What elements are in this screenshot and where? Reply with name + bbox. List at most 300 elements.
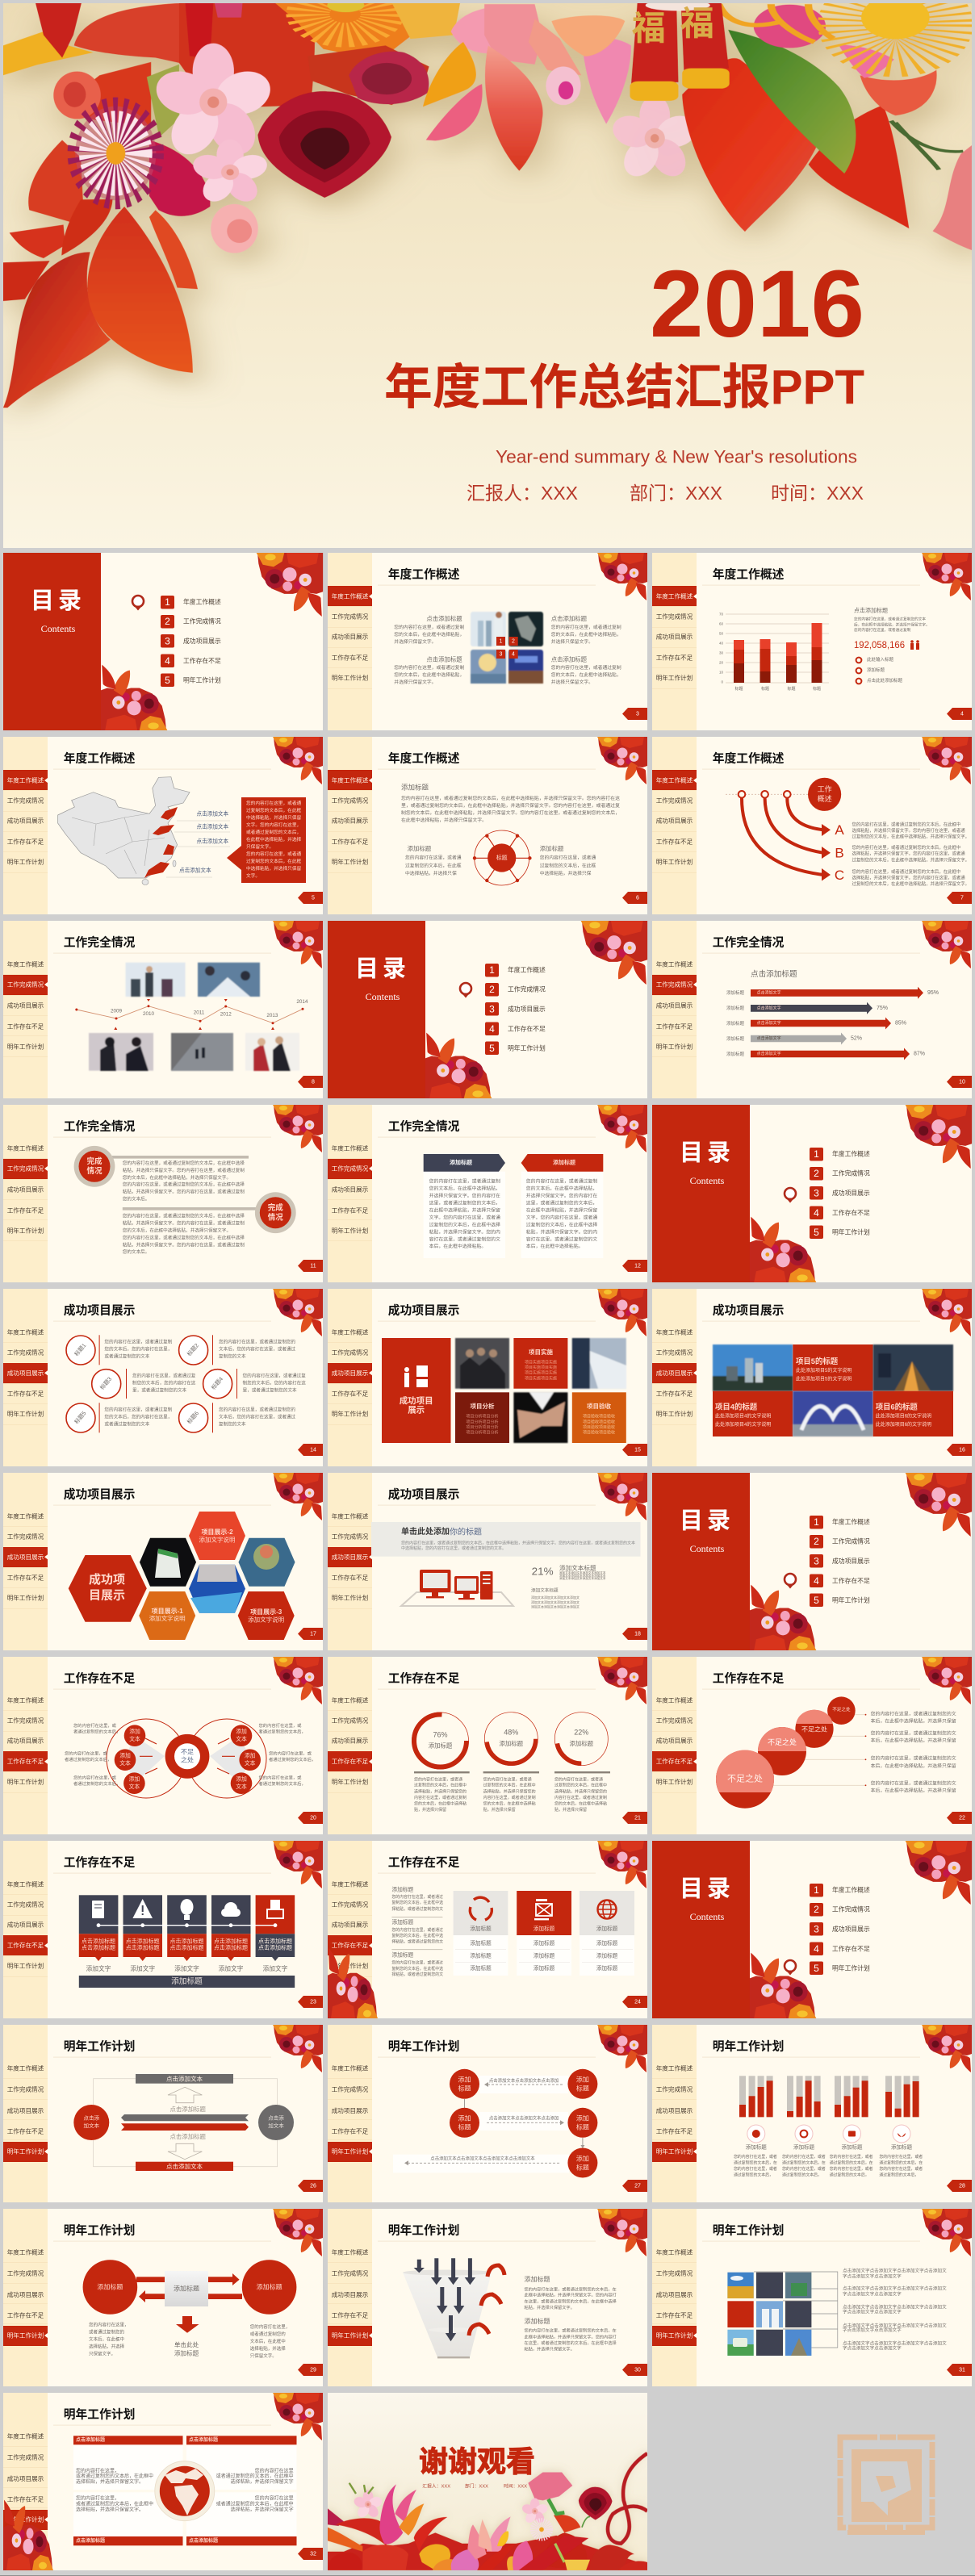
card recycle: 添加标题	[470, 1925, 492, 1932]
annotations: 点击添加文字点击添加文字点击添加文字点击添加文	[843, 2322, 947, 2328]
panel top-right: 选择粘贴，并选择只保留文字	[231, 2478, 294, 2485]
pin marker	[785, 1574, 796, 1588]
column 1: 添加文字	[86, 1964, 111, 1972]
hero author info: 部门：XXX	[630, 483, 722, 504]
contents list: 工作完成情况	[183, 617, 221, 625]
sidebar nav: 年度工作概述	[332, 1696, 369, 1704]
percentage arrows: 添加标题	[726, 1020, 745, 1027]
percentage arrows	[726, 987, 939, 1060]
left circle	[83, 2260, 137, 2315]
connector bands: 点击添加文本点击添加文本点击添加	[489, 2115, 559, 2122]
left text list: 添加标题	[391, 1885, 413, 1893]
slide 24: three cards	[328, 1841, 647, 2018]
text block 2: 粘贴，并选择只保留文字。	[525, 2345, 575, 2352]
item 2: 您的内容打在这里，或者通过复制您的	[219, 1338, 296, 1344]
sidebar nav	[328, 1144, 372, 1235]
slide base	[652, 1289, 972, 1466]
slide 28: grouped bars	[652, 2025, 972, 2202]
column text: 内容打在这里，或者通过复制	[554, 1795, 607, 1800]
page tag	[298, 1076, 323, 1088]
sidebar nav	[3, 960, 48, 1051]
contents list: 4	[814, 1207, 819, 1219]
item 4: 里，或者通过复制您的文本	[242, 1387, 297, 1394]
curved arrow diagram: C	[835, 868, 844, 883]
slide base	[3, 1657, 323, 1834]
bar chart: 标题	[761, 686, 769, 692]
sidebar nav: 成功项目展示	[656, 633, 693, 641]
left column	[424, 1154, 505, 1258]
column 3: 点击添加标题	[169, 1943, 203, 1951]
card recycle: 添加标题	[470, 1951, 492, 1959]
page tag: 21	[634, 1816, 641, 1821]
hero cover slide	[3, 0, 972, 548]
right notes	[865, 1711, 956, 1793]
sidebar nav: 年度工作概述	[7, 2248, 44, 2256]
slide base	[652, 1657, 972, 1834]
sidebar nav: 工作完成情况	[7, 1532, 44, 1540]
sidebar nav: 工作完成情况	[332, 1900, 369, 1908]
ring diagram: 添加	[236, 1775, 247, 1782]
bar chart: 标题	[813, 686, 821, 692]
card globe: 添加标题	[596, 1951, 618, 1959]
pin marker	[132, 596, 144, 610]
panel top-left: 选择粘贴，并选择只保留文字。	[76, 2478, 144, 2485]
sidebar nav: 成功项目展示	[332, 1737, 369, 1745]
left text list	[391, 1885, 443, 1977]
sidebar nav: 成功项目展示	[332, 1921, 369, 1929]
contents list: 明年工作计划	[832, 1228, 870, 1236]
hexagon project 2: 项目展示-2	[201, 1528, 233, 1536]
column text: 选择粘贴，并选择只保留您的	[483, 1788, 536, 1794]
left column: 本后，在此框中选择粘贴。	[429, 1243, 486, 1249]
side notes: 您的内容打在这里，或	[258, 1774, 302, 1780]
thank you flower bed	[328, 2453, 647, 2570]
sidebar nav: 明年工作计划	[7, 2147, 44, 2155]
column copy: 添加标题	[793, 2143, 815, 2150]
item 2: 文本后，您的内容打在这里，或者通过	[219, 1345, 296, 1352]
author info	[423, 2483, 527, 2488]
author info: 汇报人：XXX	[422, 2483, 450, 2490]
sidebar nav: 工作存在不足	[656, 838, 693, 846]
column 2: 添加文字	[130, 1964, 155, 1972]
acceptance tile: 项目验收项目验收	[583, 1414, 615, 1420]
column 1	[79, 1895, 118, 1972]
item 3: 标题3	[98, 1375, 113, 1391]
right paragraph: 只保留文字。	[250, 2352, 277, 2359]
curved arrow diagram: 工作	[818, 784, 832, 793]
contents base with flowers	[328, 921, 647, 1098]
project 5 tile: 项目5的标题	[796, 1357, 839, 1365]
contents subtitle: Contents	[690, 1911, 725, 1922]
corner flowers	[922, 2025, 972, 2072]
right paragraph: 您的内容打在这里，	[250, 2323, 290, 2330]
hero daisy	[75, 107, 156, 200]
contents subtitle: Contents	[41, 623, 76, 634]
left paragraph: 或者通过复制您的	[89, 2329, 125, 2336]
watermark stamp	[840, 2437, 932, 2535]
left text blocks: 点击添加标题	[426, 655, 462, 663]
process circles: 添加	[576, 2076, 589, 2084]
sidebar nav: 工作完成情况	[7, 980, 44, 988]
right circle: 点击添	[268, 2114, 284, 2121]
first bar and circle: 情况	[86, 1166, 103, 1176]
sidebar nav: 年度工作概述	[332, 1328, 369, 1336]
sidebar nav: 成功项目展示	[656, 1001, 693, 1009]
left column: 粘贴，并选择只保留文字。您的内	[429, 1228, 500, 1235]
timeline line: 2014	[296, 999, 308, 1005]
contents list: 4	[814, 1943, 819, 1955]
project 4 tile: 此处添加项目4的文字说明	[715, 1421, 771, 1428]
side heading and copy: 后，在此框中选择粘贴，并选择只保留文字。	[854, 621, 930, 628]
slide 29: exchange diagram	[3, 2209, 323, 2386]
analysis tile: 项目分析	[470, 1402, 495, 1410]
sidebar nav	[328, 1880, 372, 1969]
sidebar nav: 工作完成情况	[7, 2269, 44, 2277]
percentage arrows: 点击添加文字	[757, 1005, 781, 1010]
right text: 添加标题	[540, 845, 564, 852]
corner flowers	[597, 1473, 647, 1520]
corner flowers	[922, 2209, 972, 2256]
slide base	[3, 921, 323, 1098]
bottom bar: 添加标题	[171, 1976, 203, 1986]
left column: 添加标题	[450, 1159, 472, 1165]
left text blocks: 您的文本后，在此框中选择粘贴，	[394, 631, 464, 638]
title: 工作存在不足	[64, 1671, 136, 1686]
slide 23: icon columns	[3, 1841, 323, 2018]
first bar and circle	[74, 1146, 249, 1187]
sidebar nav: 明年工作计划	[656, 857, 693, 865]
sidebar nav	[652, 2248, 697, 2346]
project 6 tile: 此处添加项目6的文字说明	[876, 1421, 931, 1428]
bar chart: 30	[719, 650, 723, 655]
right paragraph: 文本后，在此框中	[250, 2338, 286, 2344]
panel top-left	[73, 2436, 182, 2490]
ring 76%	[412, 1712, 468, 1769]
contents list: 成功项目展示	[832, 1925, 870, 1933]
card globe	[580, 1891, 634, 1976]
bar chart: 50	[719, 631, 723, 636]
hexagon project 1: 项目展示-1	[152, 1608, 183, 1615]
down arrow label: 添加标题	[174, 2348, 199, 2356]
bar chart: 70	[719, 612, 723, 617]
map labels: 点击添加文本	[197, 838, 228, 844]
sidebar nav: 工作存在不足	[332, 654, 369, 662]
column text: 选择粘贴，并选择只保留您的	[414, 1788, 467, 1794]
sidebar nav: 明年工作计划	[7, 1961, 44, 1969]
right text blocks: 您的内容打在这里，或者通过复制	[551, 664, 621, 671]
hexagon project 1	[139, 1591, 195, 1640]
slide base	[3, 1289, 323, 1466]
contents list	[810, 1884, 870, 1975]
sidebar nav: 成功项目展示	[332, 1369, 369, 1377]
column 5: 添加文字	[263, 1964, 288, 1972]
column text: 贴，并选择只保留	[483, 1807, 516, 1813]
process circles: 添加	[458, 2114, 471, 2122]
sidebar nav	[328, 586, 372, 681]
secondary text: 添加文本添加文本添加文本添加文	[531, 1595, 580, 1600]
panel top-left: 您的内容打在这里，	[76, 2468, 119, 2474]
photo number tags: 3	[500, 652, 503, 657]
sidebar nav: 明年工作计划	[656, 1409, 693, 1417]
sidebar nav: 成功项目展示	[656, 2290, 693, 2298]
sidebar nav: 明年工作计划	[332, 673, 368, 681]
right circle: 添加标题	[257, 2282, 282, 2290]
photo number tags: 4	[512, 652, 515, 657]
map labels: 点击添加文本	[197, 810, 228, 817]
sidebar nav: 工作存在不足	[332, 838, 369, 846]
slide base	[328, 1657, 647, 1834]
large red tile	[382, 1338, 450, 1443]
left text: 添加标题	[408, 845, 432, 852]
slide 7: curved arrows	[652, 737, 972, 914]
contents list	[810, 1516, 870, 1607]
contents subtitle: Contents	[366, 991, 400, 1002]
slide base	[3, 1105, 323, 1282]
right notes: 您的内容打在这里，或者通过复制您的文	[871, 1755, 956, 1762]
hero author info	[467, 484, 864, 502]
sidebar nav: 工作完成情况	[332, 612, 369, 620]
page tag: 8	[312, 1080, 315, 1085]
curved arrow diagram: 概述	[818, 794, 832, 803]
left paragraph: 只保留文字。	[89, 2351, 115, 2357]
slide 4: stacked bar chart	[652, 553, 972, 730]
ring diagram: 添加	[129, 1775, 140, 1782]
sidebar nav: 明年工作计划	[7, 1593, 44, 1601]
contents list: 2	[165, 616, 170, 627]
hexagon photo left	[140, 1538, 196, 1587]
column copy: 您的内容打在这里，或者	[879, 2154, 923, 2160]
centre card	[165, 2271, 208, 2306]
text block 1: 添加标题	[525, 2275, 550, 2283]
text block 1: 您的内容打在这里，或者通过复制您的文本后，在	[525, 2285, 617, 2292]
sidebar nav: 工作完成情况	[7, 1164, 44, 1172]
contents list: 成功项目展示	[832, 1557, 870, 1565]
page tag: 26	[310, 2184, 316, 2189]
timeline line: 2011	[194, 1010, 205, 1015]
project 5 tile: 此处添加项目5的文字说明	[796, 1375, 852, 1382]
bar chart: 标题	[734, 686, 743, 692]
implementation tile	[513, 1338, 567, 1389]
side heading and copy: 您的内容打在这里，或者通过复制	[854, 627, 911, 633]
item 5: 您的文本后，您的内容打在这里，	[104, 1414, 172, 1420]
item texts: 您的内容打在这里，或者通过复制您的文本后，在此框中	[852, 844, 960, 851]
curved arrow diagram	[726, 778, 844, 883]
left circle: 添加标题	[97, 2282, 123, 2290]
left text blocks: 您的内容打在这里，或者通过复制	[394, 664, 464, 671]
page tag	[947, 892, 972, 904]
card envelope: 添加标题	[534, 1951, 555, 1959]
tile matrix	[727, 2273, 811, 2356]
percentage arrows: 85%	[895, 1020, 906, 1027]
column copy: 添加标题	[841, 2143, 863, 2150]
item 3: 里，或者通过复制您的文本	[132, 1387, 187, 1394]
annotations: 字点击添加文字点击添加文字	[843, 2273, 902, 2279]
slide base	[328, 1841, 647, 2018]
sidebar nav: 明年工作计划	[7, 1409, 44, 1417]
slide 14: six titled items	[3, 1289, 323, 1466]
author info: 时间：XXX	[504, 2483, 527, 2490]
sidebar nav: 明年工作计划	[332, 2147, 368, 2155]
card envelope: 添加标题	[534, 1925, 555, 1932]
card envelope: 添加标题	[534, 1964, 555, 1972]
sidebar nav: 明年工作计划	[332, 857, 368, 865]
connector bands: 点击添加文本点击添加文本点击添加	[489, 2077, 559, 2084]
sidebar nav: 成功项目展示	[332, 633, 369, 641]
sidebar nav	[328, 2248, 372, 2346]
sidebar nav: 工作存在不足	[7, 1206, 44, 1214]
page tag: 16	[959, 1448, 965, 1453]
contents heading: 目录	[680, 1508, 734, 1534]
analysis tile: 项目分析项目分析	[466, 1424, 499, 1430]
right notes: 本后，在此框中选择粘贴，并选择只保留	[871, 1763, 956, 1769]
left paragraph: 选择粘贴，并选择	[89, 2344, 125, 2350]
item texts: 过复制您的文本后，在此框中选择粘贴，并选择只保留文字。	[852, 834, 969, 840]
page tag	[298, 1812, 323, 1824]
bar chart: 60	[719, 621, 723, 626]
slide 12: two columns	[328, 1105, 647, 1282]
panel bottom-left: 您的内容打在这里，	[76, 2495, 119, 2502]
slide 9: contents	[328, 921, 647, 1098]
slide base	[652, 553, 972, 730]
icon: computers	[401, 1570, 513, 1606]
sidebar nav	[3, 2064, 48, 2162]
second bar and circle: 完成	[268, 1202, 283, 1212]
panel top-right: 点击添加标题	[189, 2436, 218, 2443]
secondary text: 添加文本添加文本添加文本添加文	[531, 1600, 580, 1604]
page tag	[622, 708, 647, 720]
slide base	[328, 1105, 647, 1282]
contents list: 5	[814, 1227, 819, 1238]
side notes: 者通过复制您的文本后，	[65, 1756, 111, 1763]
process circles: 添加	[576, 2114, 589, 2122]
column copy: 通过复制您的文本后，	[734, 2172, 773, 2177]
large red tile: 展示	[408, 1406, 425, 1416]
annotations: 点击添加文字点击添加文字点击添加文字点击添加文	[843, 2303, 947, 2310]
slide 25: contents	[652, 1841, 972, 2018]
column 1: 点击添加标题	[82, 1943, 115, 1951]
sidebar nav: 工作存在不足	[656, 1390, 693, 1398]
legend rings: 此处输入标题	[867, 656, 894, 663]
corner flowers	[273, 2209, 323, 2256]
ring diagram: 文本	[119, 1759, 131, 1767]
percentage arrows: 添加标题	[726, 1005, 745, 1011]
stacked circles: 不足之处	[832, 1706, 851, 1712]
side notes: 您的内容打在这里，或	[65, 1750, 108, 1756]
title: 年度工作概述	[64, 751, 136, 766]
title: 成功项目展示	[64, 1487, 136, 1502]
contents base with flowers	[652, 1105, 972, 1282]
funnel	[403, 2269, 492, 2358]
page tag: 20	[310, 1816, 316, 1821]
text block 2: 添加标题	[525, 2317, 550, 2325]
legend rings: 添加标题	[867, 667, 885, 673]
analysis tile: 项目分析项目分析	[466, 1419, 499, 1424]
slide 11: completion circles	[3, 1105, 323, 1282]
down arrow label	[174, 2340, 199, 2356]
down arrow label: 单击此处	[174, 2340, 199, 2348]
item 6: 文本后，您的内容打在这里，或者通过	[219, 1414, 296, 1420]
panel bottom-left	[73, 2492, 182, 2545]
item texts: 选择粘贴，并选择只保留文字。您的内容打在这里，或者通	[852, 850, 965, 856]
contents list: 1	[489, 964, 495, 976]
contents list: 年度工作概述	[508, 965, 546, 973]
intro paragraph: 您的内容打在这里，或者通过复制您的文本后，在此框中选择粘贴，并选择只保留文字。您的内容打在这	[401, 795, 620, 801]
page tag	[947, 2364, 972, 2376]
side heading and copy: 点击添加标题	[854, 607, 888, 613]
title: 明年工作计划	[713, 2223, 784, 2238]
hub diagram: 标题	[496, 854, 508, 861]
sidebar nav: 明年工作计划	[332, 1227, 368, 1235]
item 2: 标题2	[186, 1342, 200, 1357]
second paragraph: 粘贴，并选择只保留文字。您的内容打在这里，或者通过复制	[123, 1220, 245, 1227]
timeline line: 2013	[266, 1013, 278, 1018]
sidebar nav: 明年工作计划	[332, 1961, 368, 1969]
sidebar nav: 成功项目展示	[7, 1921, 44, 1929]
ring diagram: 添加	[245, 1751, 256, 1759]
column copy	[734, 2143, 923, 2177]
page tag: 31	[959, 2368, 965, 2373]
ring 48%: 48%	[504, 1728, 518, 1736]
sidebar nav: 工作存在不足	[7, 1757, 44, 1765]
first paragraph: 您的文本后。	[123, 1195, 149, 1202]
page tag: 12	[634, 1264, 641, 1269]
page tag	[298, 1628, 323, 1640]
page tag	[298, 1444, 323, 1456]
title: 工作完全情况	[713, 935, 785, 950]
first paragraph: 粘贴，并选择只保留文字。您的内容打在这里，或者通过复制	[123, 1167, 245, 1173]
corner flowers	[273, 921, 323, 968]
grey banner: 中选择粘贴，您的内容打在这里，或者通过复制您的文本。	[401, 1545, 506, 1551]
right column	[521, 1154, 603, 1258]
sidebar nav: 成功项目展示	[656, 2106, 693, 2114]
contents list: 3	[489, 1004, 495, 1015]
column text: 内容打在这里，或者通过复制	[483, 1795, 536, 1800]
first paragraph: 您的内容打在这里，或者通过复制您的文本后，在此框中选择	[123, 1181, 245, 1188]
ring 76%: 添加标题	[429, 1742, 453, 1750]
left text list: 添加标题	[391, 1918, 413, 1926]
title: 明年工作计划	[64, 2407, 135, 2422]
column copy: 通过复制您的文本后，在	[879, 2160, 923, 2166]
sidebar nav: 工作存在不足	[656, 2311, 693, 2319]
right column: 本后，在此框中选择粘贴。	[526, 1243, 583, 1249]
statistic 21%: 添加文本添加文本添加文本添加文本	[559, 1576, 606, 1580]
photo number tags: 1	[500, 639, 503, 644]
bar groups	[739, 2076, 919, 2117]
sidebar nav: 工作完成情况	[656, 796, 693, 804]
page tag	[947, 1076, 972, 1088]
exchange arrows	[136, 2273, 242, 2302]
hero flower garland	[3, 0, 972, 408]
map labels	[166, 810, 230, 877]
process circles: 标题	[576, 2163, 589, 2171]
contents list: 工作完成情况	[832, 1905, 870, 1913]
right circle	[258, 2105, 294, 2140]
contents list: 5	[489, 1043, 495, 1054]
contents list: 明年工作计划	[508, 1044, 546, 1052]
intro paragraph	[401, 784, 620, 823]
percentage arrows: 点击添加文字	[757, 989, 781, 995]
column copy: 您的内容打在这里，或者	[830, 2166, 873, 2172]
slide base	[328, 2209, 647, 2386]
left circle	[73, 2105, 109, 2140]
label lower: 点击添加标题	[170, 2133, 206, 2140]
stacked circles: 不足之处	[727, 1773, 763, 1784]
sidebar nav: 工作存在不足	[7, 1574, 44, 1582]
contents subtitle: Contents	[690, 1543, 725, 1554]
title: 年度工作概述	[713, 751, 785, 766]
corner flowers	[597, 1289, 647, 1336]
stacked circles	[716, 1696, 856, 1809]
